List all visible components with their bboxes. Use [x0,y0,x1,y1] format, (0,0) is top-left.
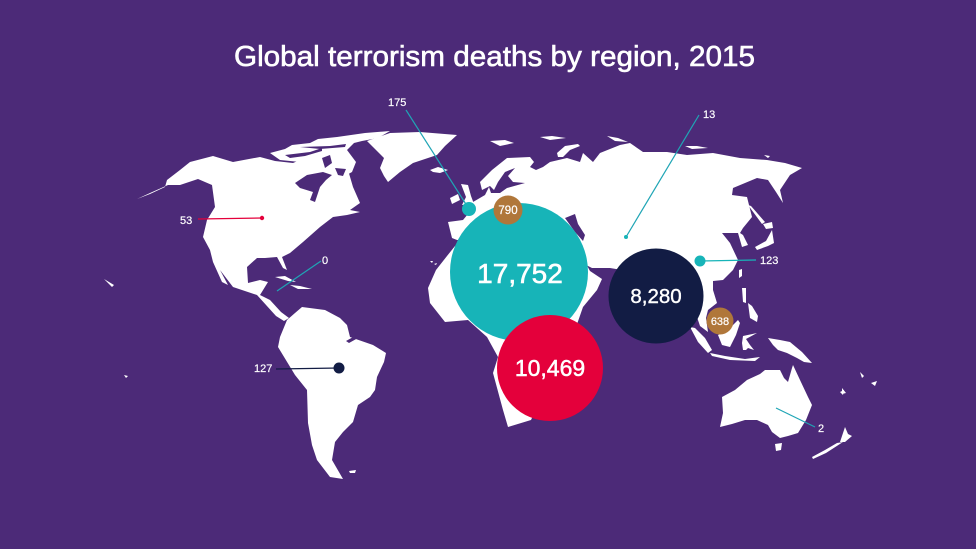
bubble: Southeast Asia 638: 638 [711,316,729,328]
title: Global terrorism deaths by region, 2015 [234,41,755,73]
callout: USA 53: 53 [180,215,192,227]
map: Philippines [742,288,758,322]
map: Caspian Sea [565,214,585,241]
map: Arctic Russia islands [490,136,770,158]
map: Greenland [367,132,457,182]
map: North America [137,156,360,321]
map: channel west [285,148,322,158]
map: Great Britain [461,184,474,205]
map: Tasmania [775,443,782,451]
map: Hudson Bay [295,172,332,202]
map: Foxe Basin [322,155,332,168]
callout: Central Asia 13: 13 [703,109,715,121]
map: New Zealand [812,427,852,459]
callout: USA 53 [180,215,264,227]
map: Pacific and Atlantic islands [104,261,877,473]
map: Australia [720,365,812,438]
map: Cuba and Hispaniola [275,276,312,289]
map: Sulawesi [742,333,757,350]
bubble: Eastern Europe 790 [494,196,522,224]
bubble: Sub-Saharan Africa 10,469: 10,469 [515,355,585,381]
bubble: South Asia 8,280 [608,248,704,344]
map: Taiwan [739,269,742,278]
callout: Western Europe 175: 175 [388,97,406,109]
map: Canadian Arctic islands [270,131,390,177]
map: Ireland [450,194,460,204]
map: Hudson Strait [335,168,346,176]
map: channel north [300,144,346,149]
map: Borneo [718,320,740,347]
map: Iceland [430,167,448,173]
world map [104,131,877,479]
callout: Central Asia 13 [624,109,715,239]
map: South America [278,307,386,479]
callout: South America 127 [254,362,344,375]
callout: East Asia 123: 123 [760,255,778,267]
callout: East Asia 123 [694,255,778,267]
map: Eurasia [448,143,802,332]
callout: Caribbean 0 [277,255,328,291]
map: Amazon delta [346,336,358,343]
bubble: Middle East and North Africa 17,752: 17,752 [477,258,563,289]
map: Sakhalin [748,205,765,224]
bubble: Middle East and North Africa 17,752 [450,203,588,341]
callout: Caribbean 0: 0 [322,255,328,267]
bubble: Eastern Europe 790: 790 [498,205,518,217]
map: New Guinea [768,338,812,363]
map: arctic channels [285,144,346,176]
callout: Australia 2: 2 [818,423,824,435]
callout: Western Europe 175 [388,97,476,216]
callout: South America 127: 127 [254,363,272,375]
map: Sumatra [690,327,712,353]
bubble: South Asia 8,280: 8,280 [630,285,682,308]
bubble: Southeast Asia 638 [706,308,734,334]
map: Africa [428,235,602,427]
map: Java and Lesser Sunda [710,353,760,361]
callout: Australia 2 [776,408,824,435]
map: Japan [755,222,774,250]
bubble: Sub-Saharan Africa 10,469 [497,315,603,421]
